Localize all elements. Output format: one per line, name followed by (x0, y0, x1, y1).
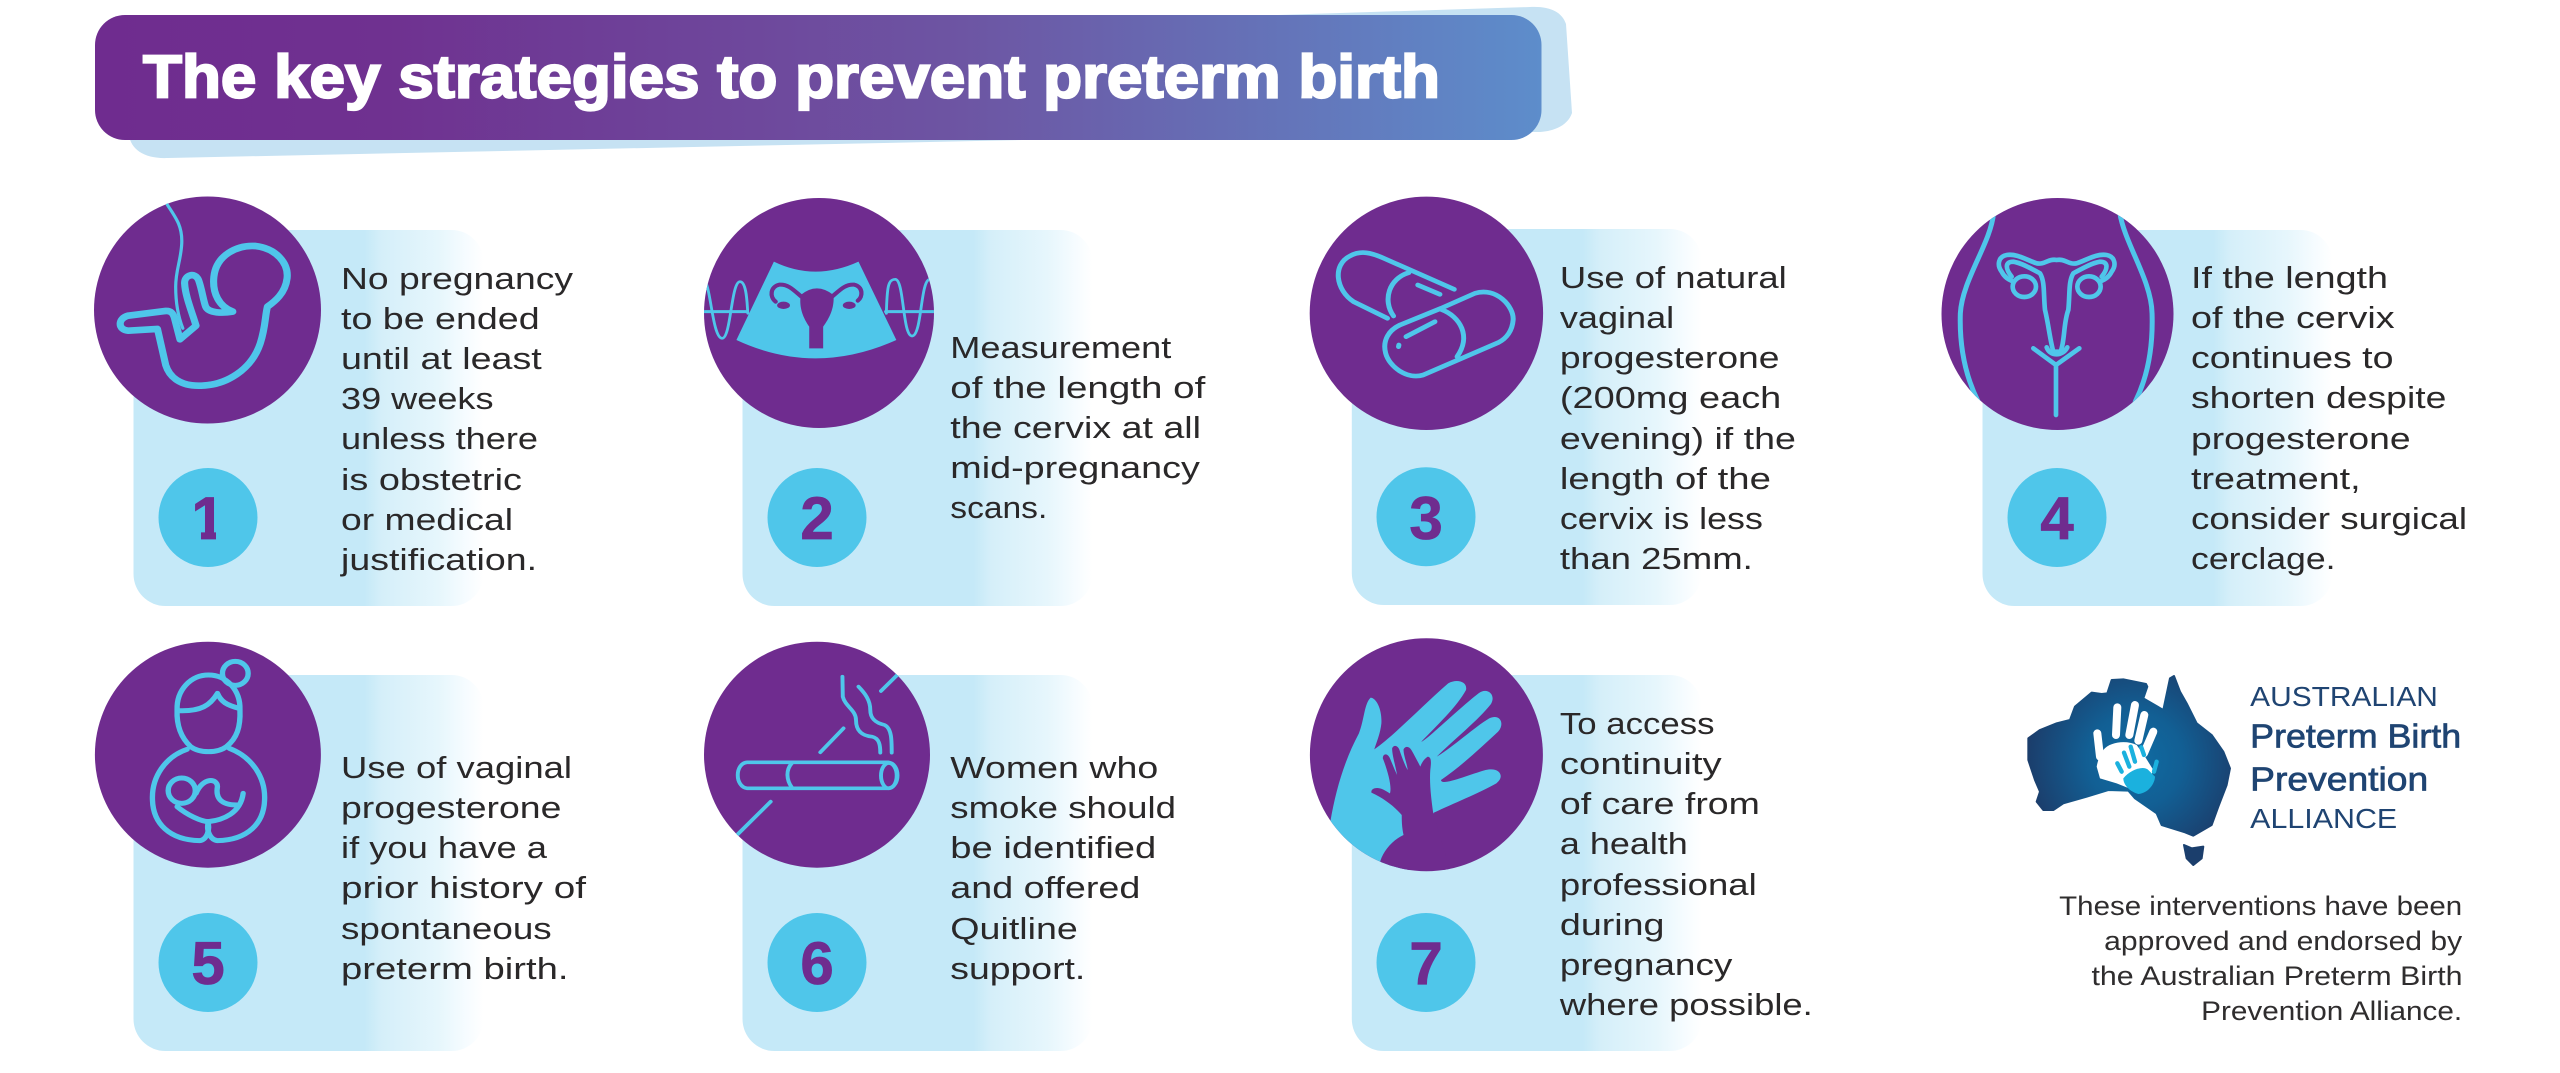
panel background 3 (1352, 229, 1702, 605)
text: strategy 4: cerclage. (2191, 541, 2336, 576)
endorsement note: approved and endorsed by (2104, 926, 2463, 956)
number badge 3 (1376, 467, 1476, 566)
text: strategy 2: the cervix at all (950, 410, 1201, 445)
panel: strategy 5 (95, 642, 586, 1051)
panel background 7 (1352, 675, 1702, 1051)
text: strategy 3: cervix is less (1560, 501, 1763, 536)
icon: fetus (120, 205, 287, 386)
text: strategy 3 (1560, 260, 1796, 576)
icon circle 6 (704, 642, 930, 868)
text: strategy 3: evening) if the (1560, 421, 1796, 456)
icon circle 5 (95, 642, 321, 868)
text: strategy 7 (1559, 706, 1813, 1022)
text: strategy 6 (950, 750, 1176, 986)
banner bar (95, 15, 1542, 140)
text: strategy 1: 39 weeks (341, 381, 494, 416)
icon circle 7 (1310, 638, 1543, 871)
logo wordmark (2250, 681, 2461, 834)
text: strategy 1: until at least (341, 341, 542, 376)
text: strategy 7: during (1560, 907, 1664, 942)
panel background 4 (1982, 230, 2332, 606)
panel background 6 (742, 675, 1092, 1051)
text: strategy 4: treatment, (2191, 461, 2361, 496)
number badge 7 (1376, 913, 1476, 1012)
icon: cigarette (735, 672, 901, 837)
icon circle 4 (1942, 198, 2174, 430)
logo wordmark: AUSTRALIAN (2250, 681, 2438, 712)
title: The key strategies to prevent preterm birth (143, 44, 1440, 111)
endorsement note (2059, 891, 2463, 1026)
text: strategy 5: prior history of (341, 870, 586, 905)
text: strategy 4: If the length (2191, 260, 2388, 295)
endorsement note: the Australian Preterm Birth (2092, 961, 2462, 991)
text: strategy 4: progesterone (2191, 421, 2411, 456)
text: strategy 6: Women who (950, 750, 1158, 785)
panel: strategy 2 (704, 198, 1206, 606)
text: strategy 1: unless there (341, 421, 538, 456)
text: strategy 4: of the cervix (2191, 300, 2395, 335)
text: strategy 1: No pregnancy (341, 261, 574, 296)
text: strategy 5 (341, 750, 586, 986)
panel: strategy 7 (1310, 638, 1813, 1051)
icon: ultrasound (704, 262, 935, 358)
endorsement note: These interventions have been (2059, 891, 2462, 921)
text: strategy 7: pregnancy (1560, 947, 1733, 982)
text: strategy 2: of the length of (950, 370, 1206, 405)
text: strategy 1: to be ended (341, 301, 540, 336)
logo: Australian Preterm Birth Prevention Alliance (2028, 676, 2461, 865)
logo wordmark: Prevention (2250, 761, 2428, 798)
text: strategy 3: progesterone (1560, 340, 1780, 375)
panel: strategy 4 (1942, 198, 2467, 606)
title banner (95, 7, 1572, 158)
text: strategy 6: and offered (950, 870, 1140, 905)
number badge 5: 5 (191, 930, 225, 997)
number badge 6: 6 (800, 930, 834, 997)
panel: strategy 3 (1310, 197, 1796, 605)
text: strategy 6: Quitline (950, 911, 1078, 946)
text: strategy 1 (340, 261, 574, 577)
icon: Australia map with hands (2028, 676, 2230, 865)
text: strategy 5: spontaneous (341, 911, 552, 946)
panel background 2 (742, 230, 1092, 606)
text: strategy 7: To access (1560, 706, 1714, 741)
icon: uterus and hips (1960, 213, 2152, 415)
text: strategy 7: of care from (1560, 786, 1760, 821)
text: strategy 1: is obstetric (341, 462, 522, 497)
text: strategy 1: justification. (340, 542, 537, 577)
icon: mother and baby (152, 661, 265, 841)
text: strategy 3: Use of natural (1560, 260, 1787, 295)
text: strategy 3: vaginal (1560, 300, 1674, 335)
text: strategy 5: preterm birth. (341, 951, 568, 986)
number badge 1: 1 (191, 485, 225, 552)
text: strategy 3: than 25mm. (1560, 541, 1753, 576)
icon circle 1 (94, 196, 321, 424)
icon circle 3 (1310, 197, 1543, 430)
number badge 4: 4 (2040, 485, 2074, 552)
number badge 5 (158, 913, 258, 1012)
text: strategy 2 (950, 330, 1206, 525)
text: strategy 7: professional (1560, 867, 1757, 902)
number badge 7: 7 (1409, 930, 1443, 997)
text: strategy 4: continues to (2191, 340, 2394, 375)
text: strategy 2: scans. (950, 490, 1047, 525)
number badge 2: 2 (800, 485, 834, 552)
text: strategy 3: (200mg each (1560, 380, 1781, 415)
text: strategy 7: a health (1560, 826, 1688, 861)
endorsement note: Prevention Alliance. (2201, 996, 2462, 1026)
text: strategy 4: shorten despite (2191, 380, 2446, 415)
panel background 1 (134, 230, 484, 606)
text: strategy 5: if you have a (341, 830, 548, 865)
icon: capsules (1338, 253, 1513, 376)
text: strategy 4 (2191, 260, 2467, 576)
text: strategy 3: length of the (1560, 461, 1771, 496)
text: strategy 6: be identified (950, 830, 1156, 865)
text: strategy 1: or medical (341, 502, 513, 537)
text: strategy 2: mid-pregnancy (950, 450, 1201, 485)
text: strategy 7: where possible. (1559, 987, 1813, 1022)
text: strategy 6: smoke should (950, 790, 1176, 825)
icon circle 2 (704, 198, 934, 428)
text: strategy 5: Use of vaginal (341, 750, 572, 785)
banner backing shape (129, 7, 1572, 158)
number badge 2 (768, 468, 866, 567)
text: strategy 5: progesterone (341, 790, 561, 825)
number badge 1 (158, 468, 258, 567)
logo wordmark: ALLIANCE (2250, 803, 2397, 834)
text: strategy 6: support. (950, 951, 1085, 986)
number badge 6 (768, 913, 866, 1012)
logo wordmark: Preterm Birth (2250, 718, 2461, 755)
icon: adult and child hands (1321, 681, 1501, 870)
panel background 5 (134, 675, 484, 1051)
text: strategy 7: continuity (1560, 746, 1722, 781)
text: strategy 2: Measurement (950, 330, 1172, 365)
number badge 4 (2008, 468, 2106, 567)
panel: strategy 6 (704, 642, 1176, 1051)
number badge 3: 3 (1409, 485, 1443, 552)
text: strategy 4: consider surgical (2191, 501, 2467, 536)
panel: strategy 1 (94, 196, 574, 606)
